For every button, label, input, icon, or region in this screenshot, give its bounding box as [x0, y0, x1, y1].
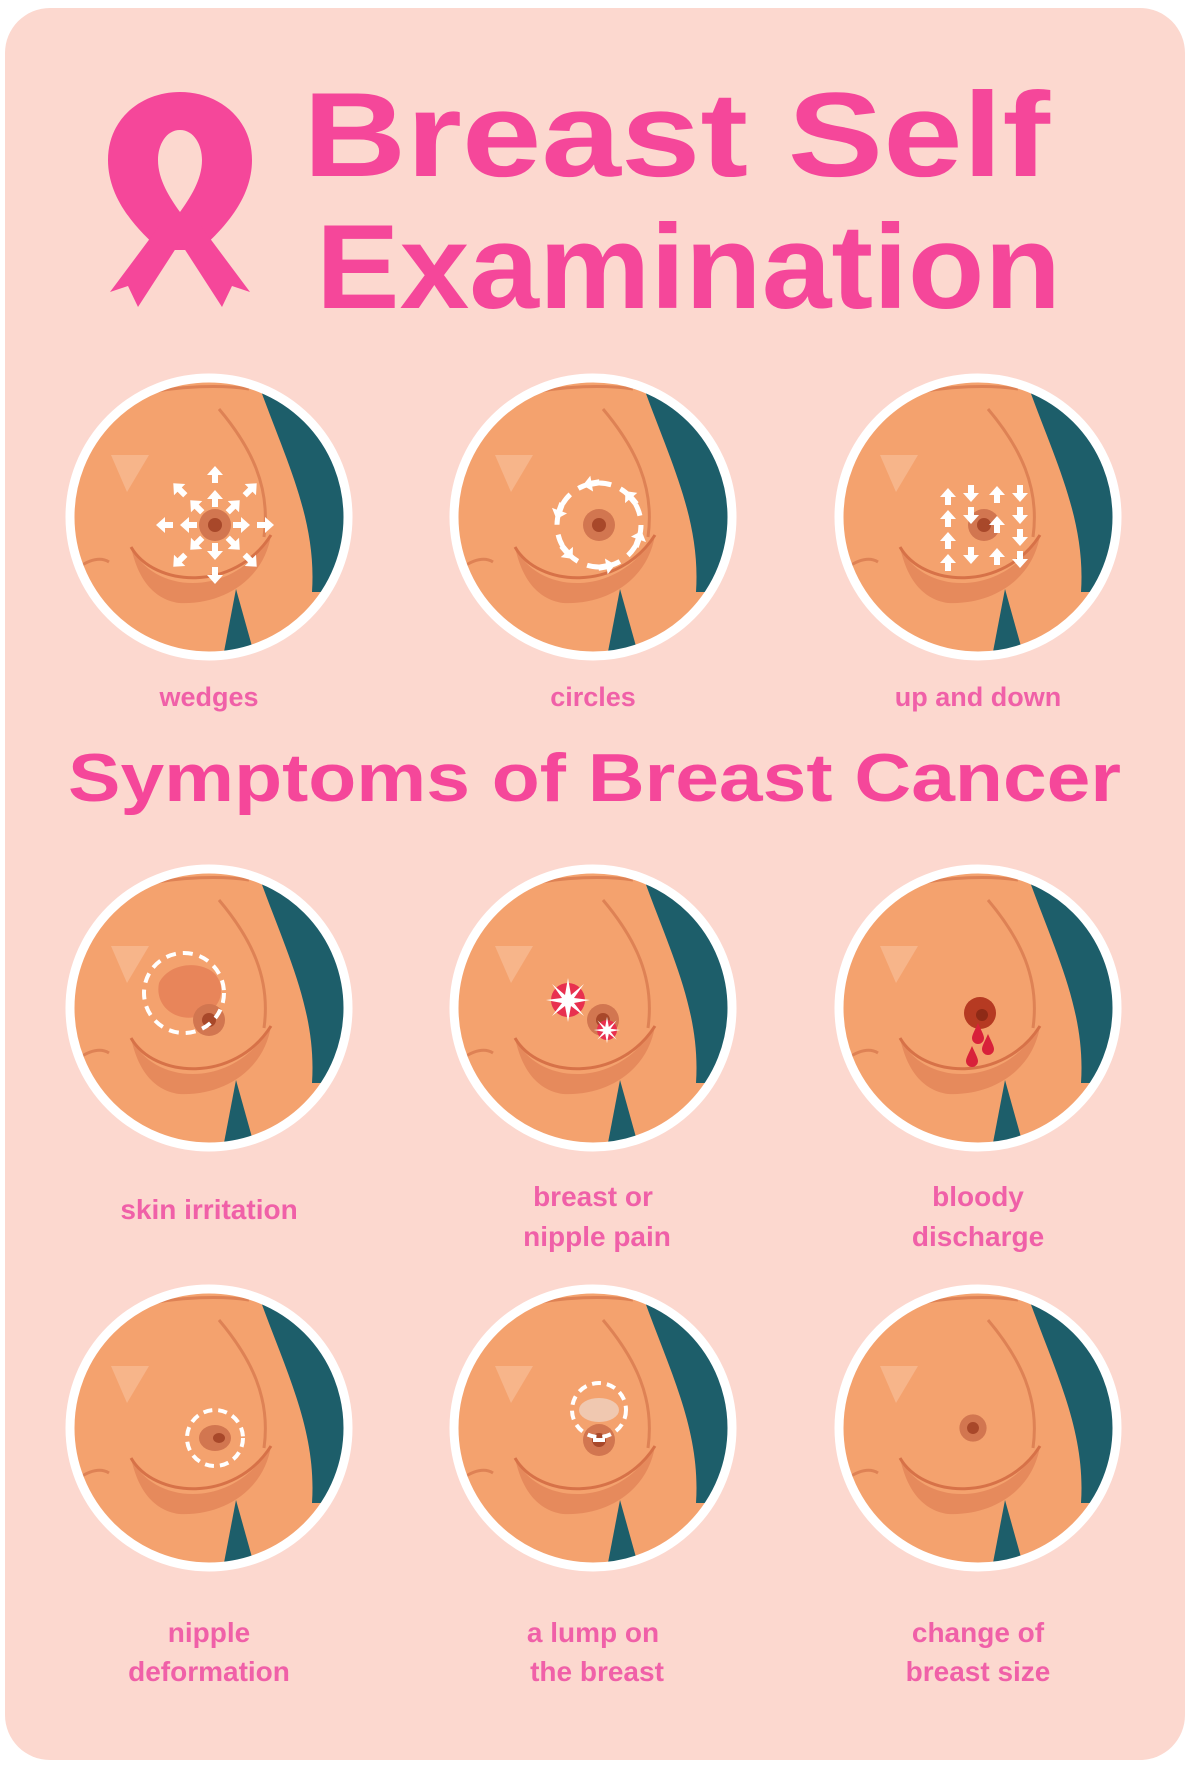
label: a lump on the breast: the breast: [530, 1656, 664, 1687]
label: bloody discharge: discharge: [912, 1221, 1044, 1252]
label: change of breast size: change of: [912, 1617, 1044, 1648]
panel: breast or nipple pain: [453, 868, 743, 1148]
label: bloody discharge: bloody: [932, 1181, 1024, 1212]
label: breast or nipple pain: nipple pain: [523, 1221, 671, 1252]
label: a lump on the breast: a lump on: [527, 1617, 659, 1648]
panel: circles: [453, 377, 743, 657]
label: nipple deformation: deformation: [128, 1656, 290, 1687]
panel: change of breast size: [838, 1288, 1128, 1568]
label: up and down: up and down: [895, 682, 1061, 712]
panel: a lump on the breast: [453, 1288, 743, 1568]
label: skin irritation: skin irritation: [120, 1194, 298, 1225]
icon: pink ribbon: [108, 92, 252, 307]
heading: symptoms: Symptoms of Breast Cancer: [68, 740, 1121, 816]
panel: up and down: [838, 377, 1128, 657]
title: Examination: [316, 200, 1061, 334]
panel: bloody discharge: [838, 868, 1128, 1148]
panel: nipple deformation: [69, 1288, 359, 1568]
label: circles: circles: [550, 682, 636, 712]
label: breast or nipple pain: breast or: [533, 1181, 653, 1212]
title: Breast Self: [303, 68, 1051, 202]
label: nipple deformation: nipple: [168, 1617, 250, 1648]
panel: wedges: [69, 377, 359, 657]
label: change of breast size: breast size: [906, 1656, 1050, 1687]
label: wedges: wedges: [158, 682, 259, 712]
title: [303, 68, 1061, 334]
panel: skin irritation: [69, 868, 359, 1148]
